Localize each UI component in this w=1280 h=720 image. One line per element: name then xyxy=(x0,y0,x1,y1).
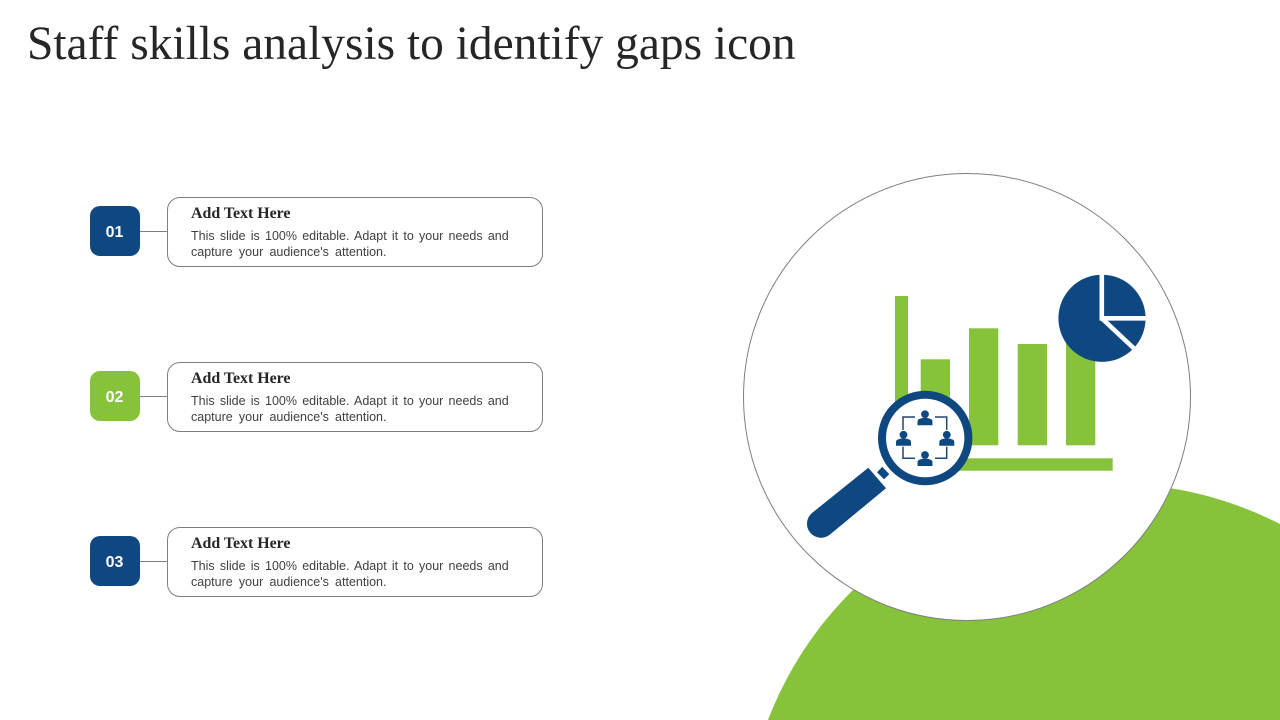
text card 03: This slide is 100% editable. Adapt it to your needs and xyxy=(191,559,509,573)
text card 02 xyxy=(167,362,543,432)
text card 02: Add Text Here xyxy=(191,370,290,386)
badge 02: 02 xyxy=(106,389,123,406)
text card 03: Add Text Here xyxy=(191,534,290,552)
icon: bar chart xyxy=(895,296,1113,471)
title: Staff skills analysis to identify gaps icon xyxy=(27,18,796,70)
text card 01: capture your audience's attention. xyxy=(191,245,386,259)
badge 02 xyxy=(90,371,140,421)
icon: team of people xyxy=(896,410,954,466)
text card 01: This slide is 100% editable. Adapt it to your needs and xyxy=(191,229,509,243)
text card 03 xyxy=(167,527,543,597)
badge 03: 03 xyxy=(106,554,123,571)
list item 03 xyxy=(90,527,543,597)
green background circle xyxy=(768,483,1280,720)
text card 02: This slide is 100% editable. Adapt it to your needs and xyxy=(191,394,509,408)
text card 03: capture your audience's attention. xyxy=(191,575,386,589)
icon: magnifying glass xyxy=(807,395,968,538)
badge 01: 01 xyxy=(106,224,123,241)
text card 02: capture your audience's attention. xyxy=(191,410,386,424)
badge 03 xyxy=(90,536,140,586)
list item 02 xyxy=(90,362,543,432)
list item 01 xyxy=(90,197,543,267)
icon: pie chart xyxy=(1058,274,1146,362)
white outlined circle xyxy=(744,174,1190,620)
text card 01: Add Text Here xyxy=(191,204,290,222)
badge 01 xyxy=(90,206,140,256)
text card 01 xyxy=(167,197,543,267)
